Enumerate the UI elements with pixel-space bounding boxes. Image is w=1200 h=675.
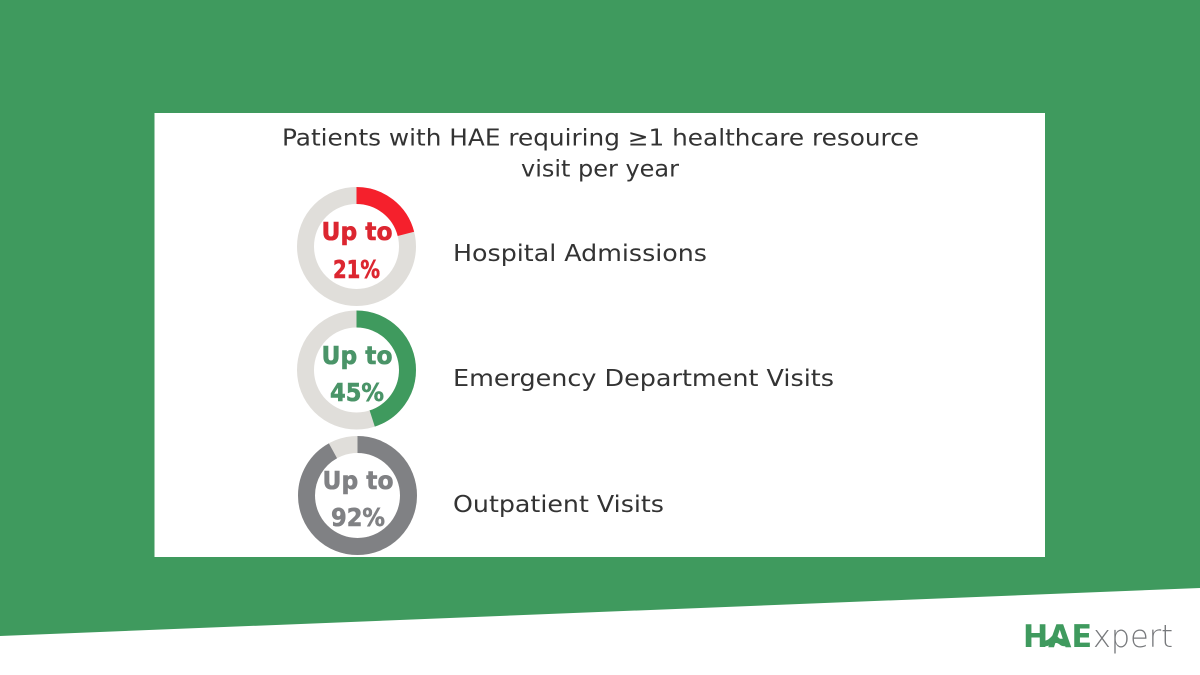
donut: outpatient 92%: 92% (331, 503, 385, 532)
logo: HAExpert: HAE (1023, 619, 1092, 655)
donut: emergency department 45%: 45% (330, 378, 384, 407)
donut: hospital admissions 21% (306, 196, 408, 298)
donut: outpatient 92% (306, 444, 408, 546)
heading: Patients with HAE requiring ≥1 healthcare resource (282, 126, 919, 152)
panel: white content card (154, 113, 1045, 557)
heading: visit per year (521, 156, 680, 182)
logo: HAExpert (1023, 619, 1173, 655)
label: hospital admissions: Hospital Admissions (453, 241, 707, 267)
heading (282, 126, 919, 182)
donut: hospital admissions 21%: 21% (333, 255, 380, 284)
donut: hospital admissions 21%: Up to (322, 217, 392, 246)
label: emergency department visits: Emergency Department Visits (453, 366, 834, 392)
donut: emergency department 45% (306, 319, 408, 421)
label: outpatient visits: Outpatient Visits (453, 492, 664, 518)
logo: HAExpert: xpert (1093, 619, 1173, 655)
donut: emergency department 45%: Up to (322, 341, 392, 370)
donut: outpatient 92%: Up to (322, 466, 394, 495)
